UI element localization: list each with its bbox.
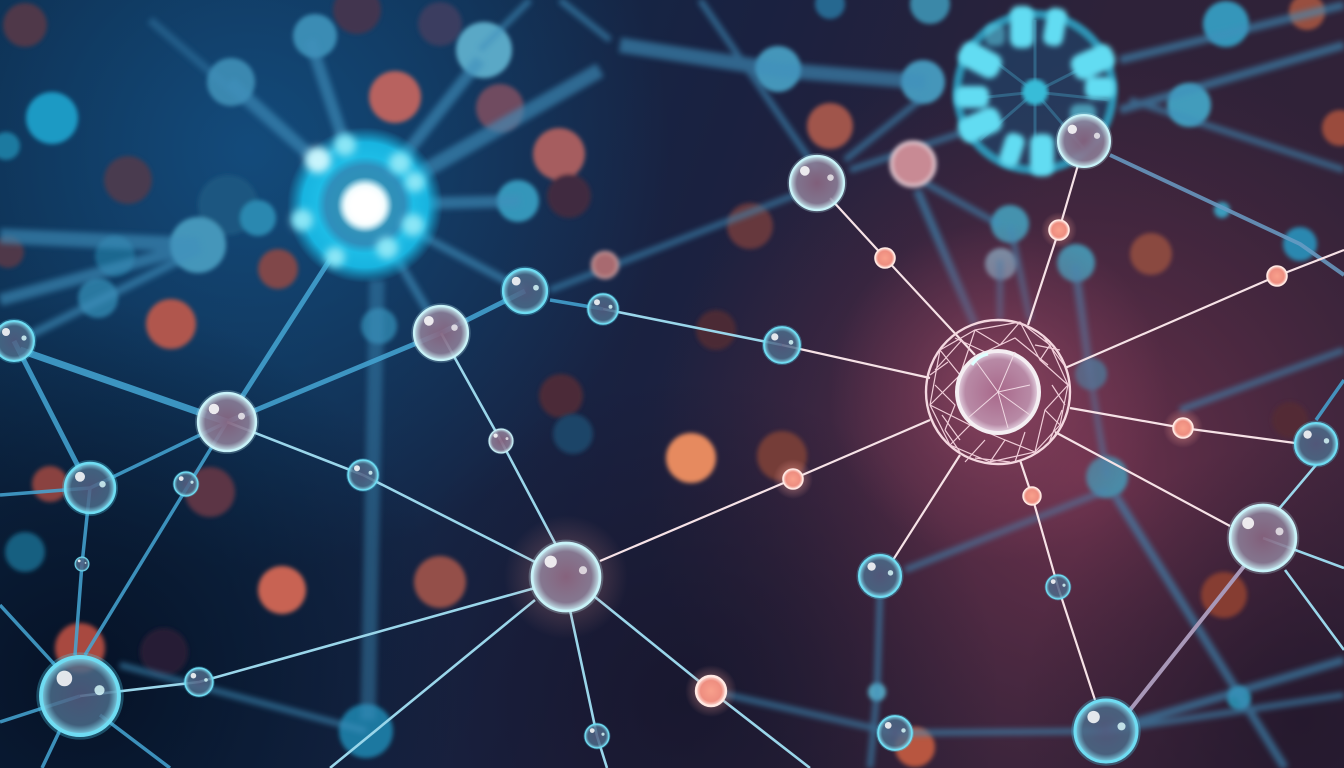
coral nodes [696, 220, 1287, 706]
bright pink-white connection lines [600, 165, 1344, 700]
hub: glowing blue node [287, 127, 443, 283]
glow around central nodes [504, 212, 1203, 717]
wireframe sphere: central node [926, 320, 1070, 464]
cyan nodes [0, 266, 1340, 766]
wheel node: top right [954, 6, 1118, 176]
blue connection lines [0, 155, 1344, 768]
blurred pearl nodes [592, 142, 935, 278]
light connection lines [80, 309, 1344, 768]
pearl nodes [195, 112, 1299, 614]
